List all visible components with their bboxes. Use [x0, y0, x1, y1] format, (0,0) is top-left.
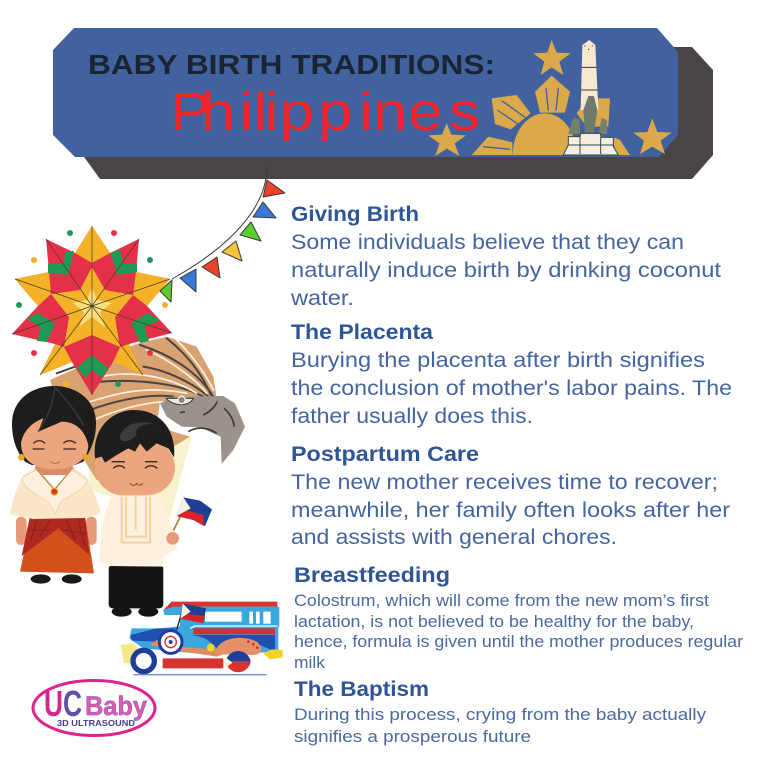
section: the baptism: [294, 678, 707, 746]
body text: naturally induce birth by drinking coconut: [291, 259, 721, 282]
star ribs: [12, 226, 172, 395]
spare wheel: [159, 631, 182, 653]
man trousers: [109, 565, 163, 617]
sun disc: [513, 113, 577, 155]
woman shoes: [31, 574, 82, 584]
section: giving birth: [290, 203, 721, 310]
road shadow: [133, 673, 267, 677]
body text: the conclusion of mother's labor pains. The: [291, 377, 732, 400]
banner artwork: sun, stars and monument: [428, 40, 672, 156]
man head: [95, 410, 175, 495]
woman arms: [16, 517, 97, 545]
eagle eye: [166, 396, 193, 405]
body text: [290, 231, 721, 310]
banner: [53, 28, 713, 179]
fender: [215, 638, 261, 655]
heading: Giving Birth: [291, 203, 419, 226]
hair parting highlight: [38, 387, 83, 432]
peach body strip: [150, 640, 227, 657]
necklace pendant: [37, 469, 72, 495]
jeep flag: [177, 603, 206, 630]
title script word: Philippines: [170, 82, 480, 142]
body text: [294, 705, 707, 746]
section: breastfeeding: [294, 564, 743, 672]
star base: [12, 226, 172, 395]
side bar: [163, 658, 223, 668]
body text: [291, 349, 732, 428]
body text: Colostrum, which will come from the new mom’s first: [294, 591, 709, 610]
heading: Postpartum Care: [291, 443, 479, 466]
inner yellow star: [51, 267, 133, 347]
parol star lantern: [12, 226, 172, 395]
title line: BABY BIRTH TRADITIONS:: [88, 49, 495, 80]
body text: [291, 471, 730, 549]
star dots: [16, 230, 168, 387]
shirt embroidery: [122, 497, 150, 543]
banner panel: [53, 28, 678, 157]
green bands: [27, 249, 160, 378]
hood accent: [131, 628, 177, 642]
beak marks: [180, 402, 234, 433]
star 3: [633, 118, 672, 154]
collar: [22, 469, 87, 514]
body dark wave: [192, 635, 275, 652]
eagle beak: [160, 396, 245, 464]
logo Baby: Baby: [85, 691, 147, 721]
logo tagline: 3D ULTRASOUND: [57, 718, 135, 728]
body text: hence, formula is given until the mother produces regular: [294, 632, 743, 651]
windows: [163, 612, 271, 627]
logo: [33, 680, 155, 736]
logo ring: [33, 680, 155, 736]
earrings: [18, 454, 89, 461]
inner pale star: [73, 288, 112, 327]
bunting string: [172, 165, 267, 279]
man in barong: [95, 410, 212, 617]
woman face: [21, 418, 88, 469]
body text: Burying the placenta after birth signifies: [291, 349, 705, 372]
body text: Some individuals believe that they can: [291, 231, 684, 254]
section: postpartum care: [291, 443, 730, 549]
body text: water.: [290, 287, 354, 310]
fender dots: [247, 640, 259, 649]
body text: signifies a prosperous future: [294, 727, 531, 746]
logo UC: UC: [44, 683, 82, 724]
woman overskirt: [22, 516, 89, 556]
body text: The new mother receives time to recover;: [291, 471, 718, 494]
feather stripes: [57, 338, 213, 420]
rear wheel flag: [225, 651, 251, 672]
rear bumper: [263, 649, 283, 659]
eagle chest: [87, 430, 192, 517]
sun rays: [472, 76, 630, 155]
body text: During this process, crying from the baby actually: [294, 705, 707, 724]
body text: milk: [294, 653, 326, 672]
monument statue: [563, 96, 618, 155]
sun emblem: [207, 644, 215, 652]
cabin frame: [163, 607, 279, 627]
yellow tips: [15, 226, 170, 375]
roof: [163, 602, 277, 610]
star 2: [428, 123, 466, 156]
barong shirt: [99, 493, 177, 567]
heading: Breastfeeding: [294, 564, 450, 587]
hand flag: [173, 497, 212, 531]
heading: The Baptism: [294, 678, 429, 701]
woman blouse: [10, 467, 101, 519]
heading: The Placenta: [291, 321, 433, 344]
body text: meanwhile, her family often looks after her: [291, 499, 730, 522]
man hand: [166, 532, 179, 545]
eagle feathers: [50, 337, 217, 480]
woman skirt: [20, 517, 94, 573]
jeep body: [129, 625, 278, 655]
bunting: [160, 165, 285, 302]
body text: lactation, is not believed to be healthy for the baby,: [294, 612, 694, 631]
section: the placenta: [291, 321, 732, 428]
front decoration: [121, 643, 140, 663]
star 1: [533, 40, 571, 75]
jeepney: [121, 602, 283, 675]
body white trim: [190, 626, 277, 628]
body text: father usually does this.: [291, 405, 533, 428]
body text: [294, 591, 743, 672]
white neckline: [37, 475, 72, 490]
obelisk: [581, 40, 598, 110]
woman hair: [12, 386, 96, 465]
front wheel: [133, 650, 154, 672]
ray lines: [483, 88, 558, 149]
neck: [35, 465, 73, 477]
body red stripe: [193, 628, 275, 634]
woman in traditional dress: [10, 386, 101, 584]
eagle illustration: [50, 337, 245, 517]
body text: and assists with general chores.: [291, 526, 617, 549]
banner shadow: [79, 47, 713, 179]
